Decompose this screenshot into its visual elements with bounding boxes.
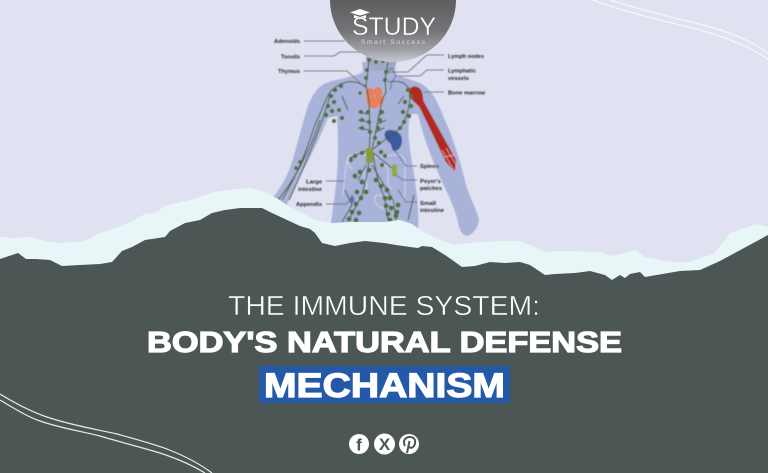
anatomy labels: Spleen [420,164,440,170]
thoracic duct [366,148,373,163]
title line 1: THE IMMUNE SYSTEM: [228,290,540,321]
logo tagline: Smart Success [361,39,426,46]
title line 3: MECHANISM [264,367,505,405]
icon: thymus [366,87,384,108]
icon: spleen [385,130,402,151]
anatomy labels: Peyer's [420,179,441,185]
pointer lines [304,41,444,204]
icon: facebook: f [356,436,362,454]
anatomy labels: intestine [298,187,322,193]
logo circle [330,0,456,62]
anatomy labels: Thymus [278,69,300,75]
icon: graduation cap [350,9,370,18]
decorative curved lines bottom left [0,394,212,473]
anatomy labels: Lymph nodes [448,54,484,60]
anatomy labels: Large [306,180,322,186]
anatomy labels: intestine [420,208,444,214]
title highlight box [259,366,510,403]
anatomy labels: patches [420,186,442,192]
body silhouette [268,62,479,236]
icon: bone marrow arm bone [409,86,458,172]
intestines outline [342,155,405,208]
title [147,290,622,405]
dark lower panel with torn edge [0,208,768,473]
logo badge [330,0,456,62]
anatomy labels: Lymphatic [448,68,476,74]
anatomy labels [274,39,486,214]
lymph nodes [294,58,413,222]
anatomy labels: Adenoids [274,39,300,45]
anatomy labels: vessels [448,76,469,82]
anatomy labels: Tonsils [281,54,300,60]
anatomy labels: Small [420,201,436,207]
appendix marker [349,194,355,204]
decorative curved lines top right [593,0,768,59]
social icons [349,434,419,454]
icon: X: X [379,435,391,454]
title line 2: BODY'S NATURAL DEFENSE [147,327,622,359]
anatomy labels: Bone marrow [448,90,486,96]
anatomy labels: Appendix [296,202,323,208]
lymphatic vessels [278,58,414,222]
icon: pinterest [399,434,419,454]
torn paper white band [0,188,768,300]
anatomy illustration: lymphatic system [268,39,486,236]
faint head [366,45,400,70]
Peyer's patches [392,164,397,177]
logo wordmark: STUDY [352,13,436,41]
